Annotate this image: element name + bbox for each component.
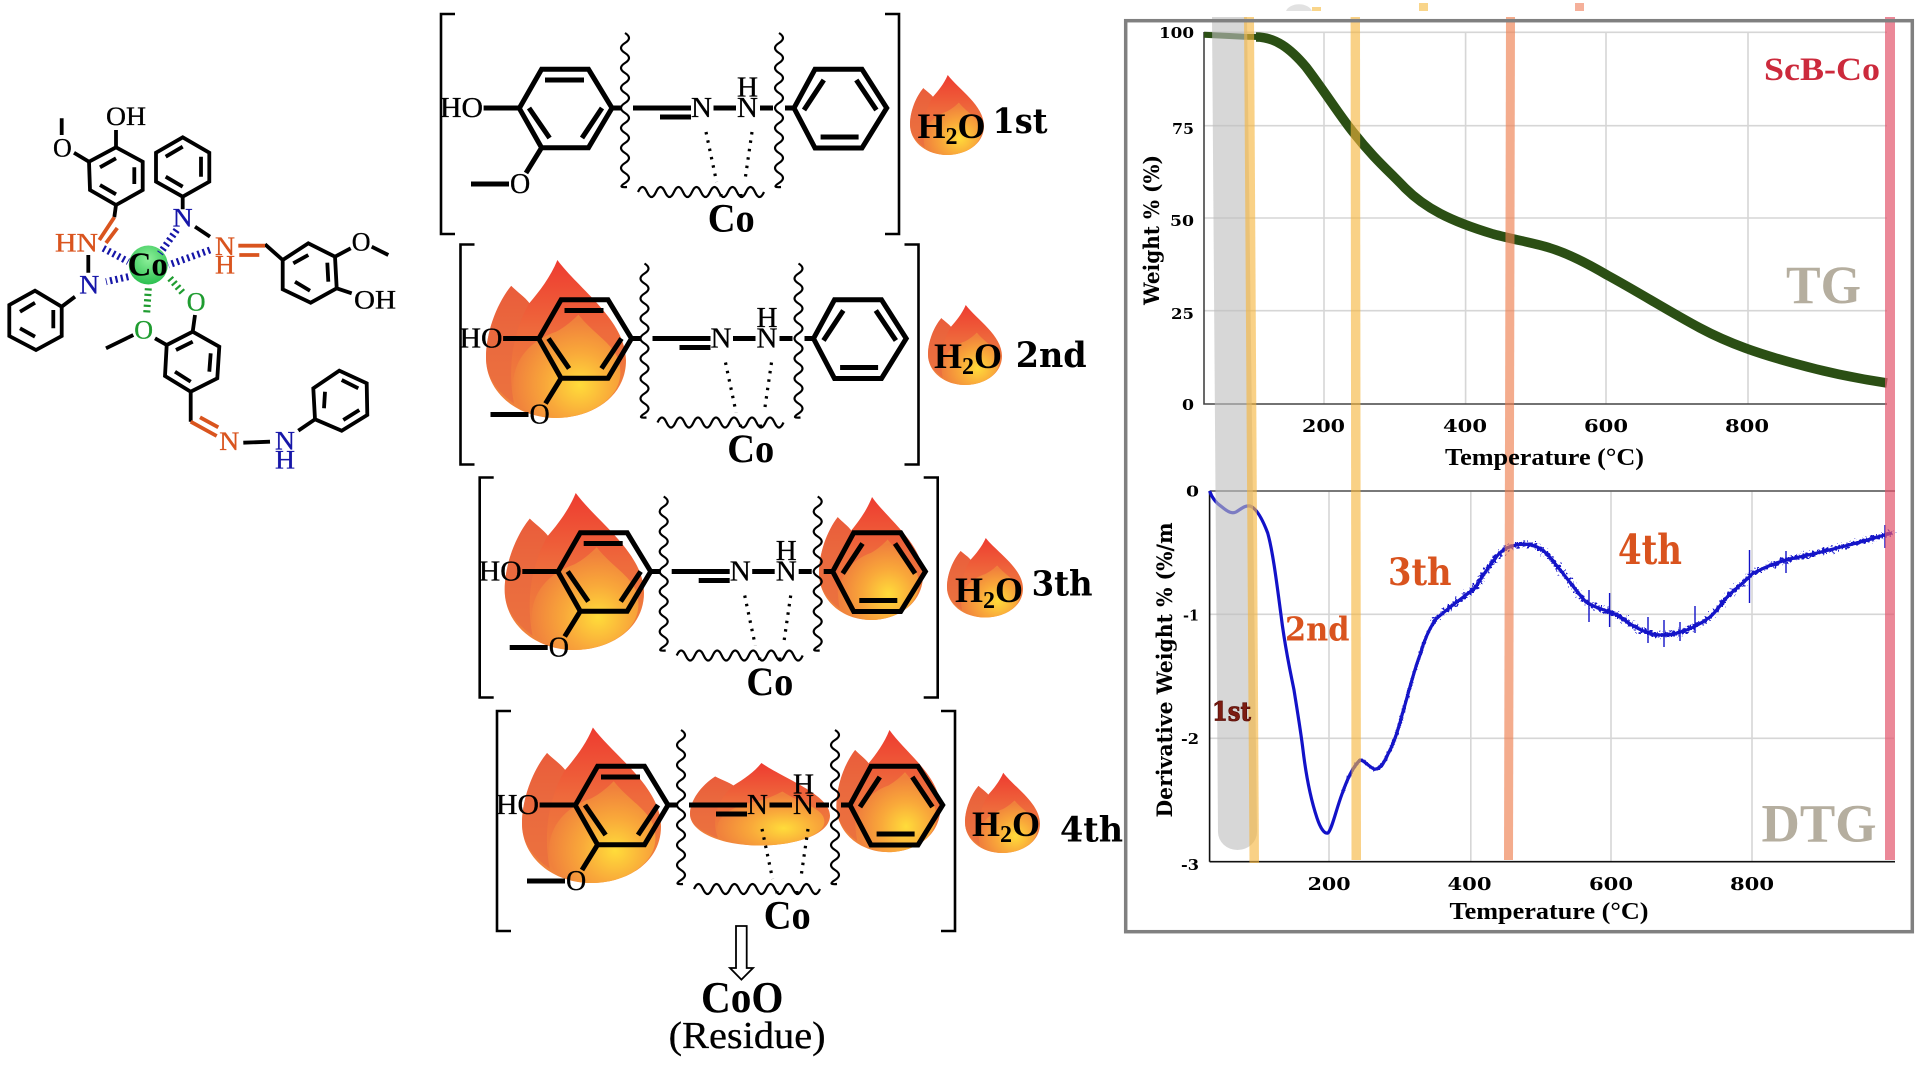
atom labels: H	[275, 445, 295, 474]
DTG y-axis labels: -3	[1181, 856, 1199, 874]
flame icon	[947, 538, 1023, 618]
TG x-axis labels: 200	[1302, 416, 1345, 437]
CoO product label: CoO	[701, 973, 784, 1022]
atom labels: N	[215, 232, 235, 261]
atom labels	[53, 102, 396, 474]
DTG x-axis labels: 800	[1730, 874, 1774, 895]
H2O label: O	[974, 336, 1002, 376]
atom labels: O	[134, 315, 153, 344]
DTG y-axis labels: 0	[1186, 483, 1199, 501]
molecule fragment: HO	[496, 790, 539, 821]
molecule fragment: H	[793, 770, 814, 801]
atom labels: N	[219, 427, 240, 456]
Co label: Co	[128, 247, 168, 284]
molecule fragment: HO	[440, 93, 483, 124]
DTG y-axis labels: -1	[1183, 607, 1199, 625]
stage label: 2nd	[1016, 335, 1087, 376]
panel: 2nd decomposition stage	[460, 244, 1087, 471]
molecule fragment: HO	[479, 556, 522, 588]
band: 1st stage grey capsule	[1212, 17, 1257, 850]
molecule fragment: N	[747, 790, 768, 821]
molecule fragment: O	[530, 400, 550, 430]
atom labels: OH	[106, 102, 146, 131]
molecule fragment: Co	[708, 196, 755, 241]
TG x-axis title: Temperature (°C)	[1445, 445, 1644, 471]
molecule fragment: N	[793, 790, 814, 821]
DTG x-axis labels: 200	[1308, 874, 1351, 895]
stage label: 4th	[1060, 810, 1123, 851]
1st stage label: 1st	[1212, 698, 1251, 728]
molecule fragment: O	[566, 866, 586, 897]
TG label: TG	[1786, 255, 1861, 315]
orange imine double bonds	[99, 217, 265, 436]
green hashed coordination bonds	[147, 278, 183, 313]
sample name: ScB-Co	[1764, 52, 1880, 88]
molecule fragment: O	[549, 632, 569, 664]
TG y-axis labels: 0	[1182, 396, 1194, 414]
H2O label: H	[955, 570, 983, 610]
molecule fragment	[460, 244, 918, 471]
2nd stage label: 2nd	[1285, 610, 1350, 649]
DTG x-axis labels: 600	[1589, 874, 1633, 895]
stage label: 3th	[1032, 564, 1093, 605]
molecule fragment: N	[710, 324, 732, 354]
molecule fragment: H	[756, 303, 778, 334]
TG y-axis labels: 100	[1159, 24, 1194, 42]
molecule fragment	[479, 478, 938, 704]
TG y-axis labels: 50	[1170, 212, 1194, 230]
molecule fragment: O	[510, 169, 530, 200]
stage label: 1st	[992, 101, 1048, 142]
DTG x-axis labels	[1308, 874, 1774, 895]
4th stage label: 4th	[1618, 526, 1682, 574]
DTG chart grid	[1210, 491, 1894, 861]
TG y-axis title: Weight % (%)	[1139, 155, 1164, 306]
DTG axes	[1210, 491, 1895, 862]
H2O label: O	[1012, 804, 1040, 844]
H2O label: 2	[962, 354, 974, 380]
molecule fragment: HO	[460, 324, 502, 354]
residue label: (Residue)	[669, 1015, 826, 1057]
atom labels: O	[352, 228, 370, 257]
molecule fragment	[496, 711, 955, 938]
H2O label: 2	[983, 588, 995, 614]
band: 3rd stage end orange	[1504, 17, 1515, 860]
atom labels: O	[53, 134, 72, 163]
molecule fragment: Co	[727, 426, 774, 471]
burning hydrazone flame	[690, 763, 830, 846]
H2O label: 2	[946, 124, 958, 150]
band: 2nd stage start yellow	[1244, 17, 1259, 863]
molecule fragment: Co	[764, 893, 811, 938]
black skeleton bonds and rings	[9, 118, 388, 443]
molecule fragment: N	[737, 93, 758, 124]
3th stage label: 3th	[1388, 550, 1452, 594]
atom labels: HN	[55, 229, 98, 258]
atom labels: N	[79, 270, 100, 299]
molecule fragment: N	[730, 556, 751, 588]
chart frame	[1126, 21, 1912, 932]
atom labels: OH	[354, 285, 396, 314]
TG x-axis labels: 800	[1725, 416, 1769, 437]
molecule fragment: N	[776, 556, 797, 588]
molecule fragment: N	[756, 324, 778, 354]
blue hashed coordination bonds	[103, 230, 210, 282]
band: 4th stage end red	[1885, 17, 1895, 860]
molecule fragment: Co	[746, 659, 793, 704]
molecule fragment: N	[691, 93, 712, 124]
molecule fragment: H	[776, 536, 797, 567]
H2O label: O	[995, 570, 1023, 610]
panel: 3rd decomposition stage	[479, 478, 1093, 704]
TG x-axis labels: 400	[1443, 416, 1487, 437]
panel: 1st decomposition stage	[440, 14, 1048, 241]
flame icon	[928, 305, 1002, 385]
atom labels: O	[187, 288, 205, 317]
DTG y-axis title: Derivative Weight % (%/m	[1152, 522, 1177, 818]
TG x-axis labels: 600	[1584, 416, 1628, 437]
burning phenyl ring flame	[819, 497, 923, 620]
TG axes	[1204, 32, 1887, 404]
arrow to residue	[730, 926, 753, 980]
TG chart grid	[1204, 32, 1887, 404]
TG y-axis labels: 25	[1171, 305, 1194, 323]
H2O label: H	[918, 106, 946, 146]
H2O label: 2	[1000, 822, 1012, 848]
band: 2nd stage end yellow	[1351, 17, 1361, 860]
TG curve	[1204, 35, 1887, 383]
atom labels: N	[173, 204, 193, 233]
DTG label: DTG	[1762, 794, 1876, 854]
TG y-axis labels	[1159, 24, 1194, 414]
burning vanillin ring flame	[486, 260, 626, 418]
H2O label: H	[972, 804, 1000, 844]
TG x-axis labels	[1302, 416, 1769, 437]
DTG curve	[1210, 491, 1892, 833]
burning phenyl ring flame	[836, 730, 940, 852]
cobalt centre	[129, 246, 168, 284]
burning vanillin ring flame	[522, 728, 661, 883]
panel: cobalt complex structure	[9, 102, 396, 474]
panel: 4th decomposition stage	[496, 711, 1123, 938]
DTG y-axis labels	[1181, 483, 1199, 874]
burning vanillin ring flame	[505, 493, 644, 650]
panel: TG and DTG charts	[1126, 3, 1912, 932]
DTG x-axis title: Temperature (°C)	[1450, 899, 1648, 925]
DTG y-axis labels: -2	[1181, 730, 1199, 748]
flame icon	[910, 75, 984, 155]
atom labels: N	[275, 426, 295, 455]
H2O label: O	[958, 106, 986, 146]
DTG x-axis labels: 400	[1448, 874, 1492, 895]
molecule fragment	[440, 14, 899, 241]
flame icon	[965, 773, 1040, 853]
TG y-axis labels: 75	[1172, 120, 1194, 138]
H2O label: H	[934, 336, 962, 376]
atom labels: H	[215, 250, 235, 279]
stray band fragments above frame	[1286, 3, 1584, 11]
molecule fragment: H	[737, 73, 758, 104]
